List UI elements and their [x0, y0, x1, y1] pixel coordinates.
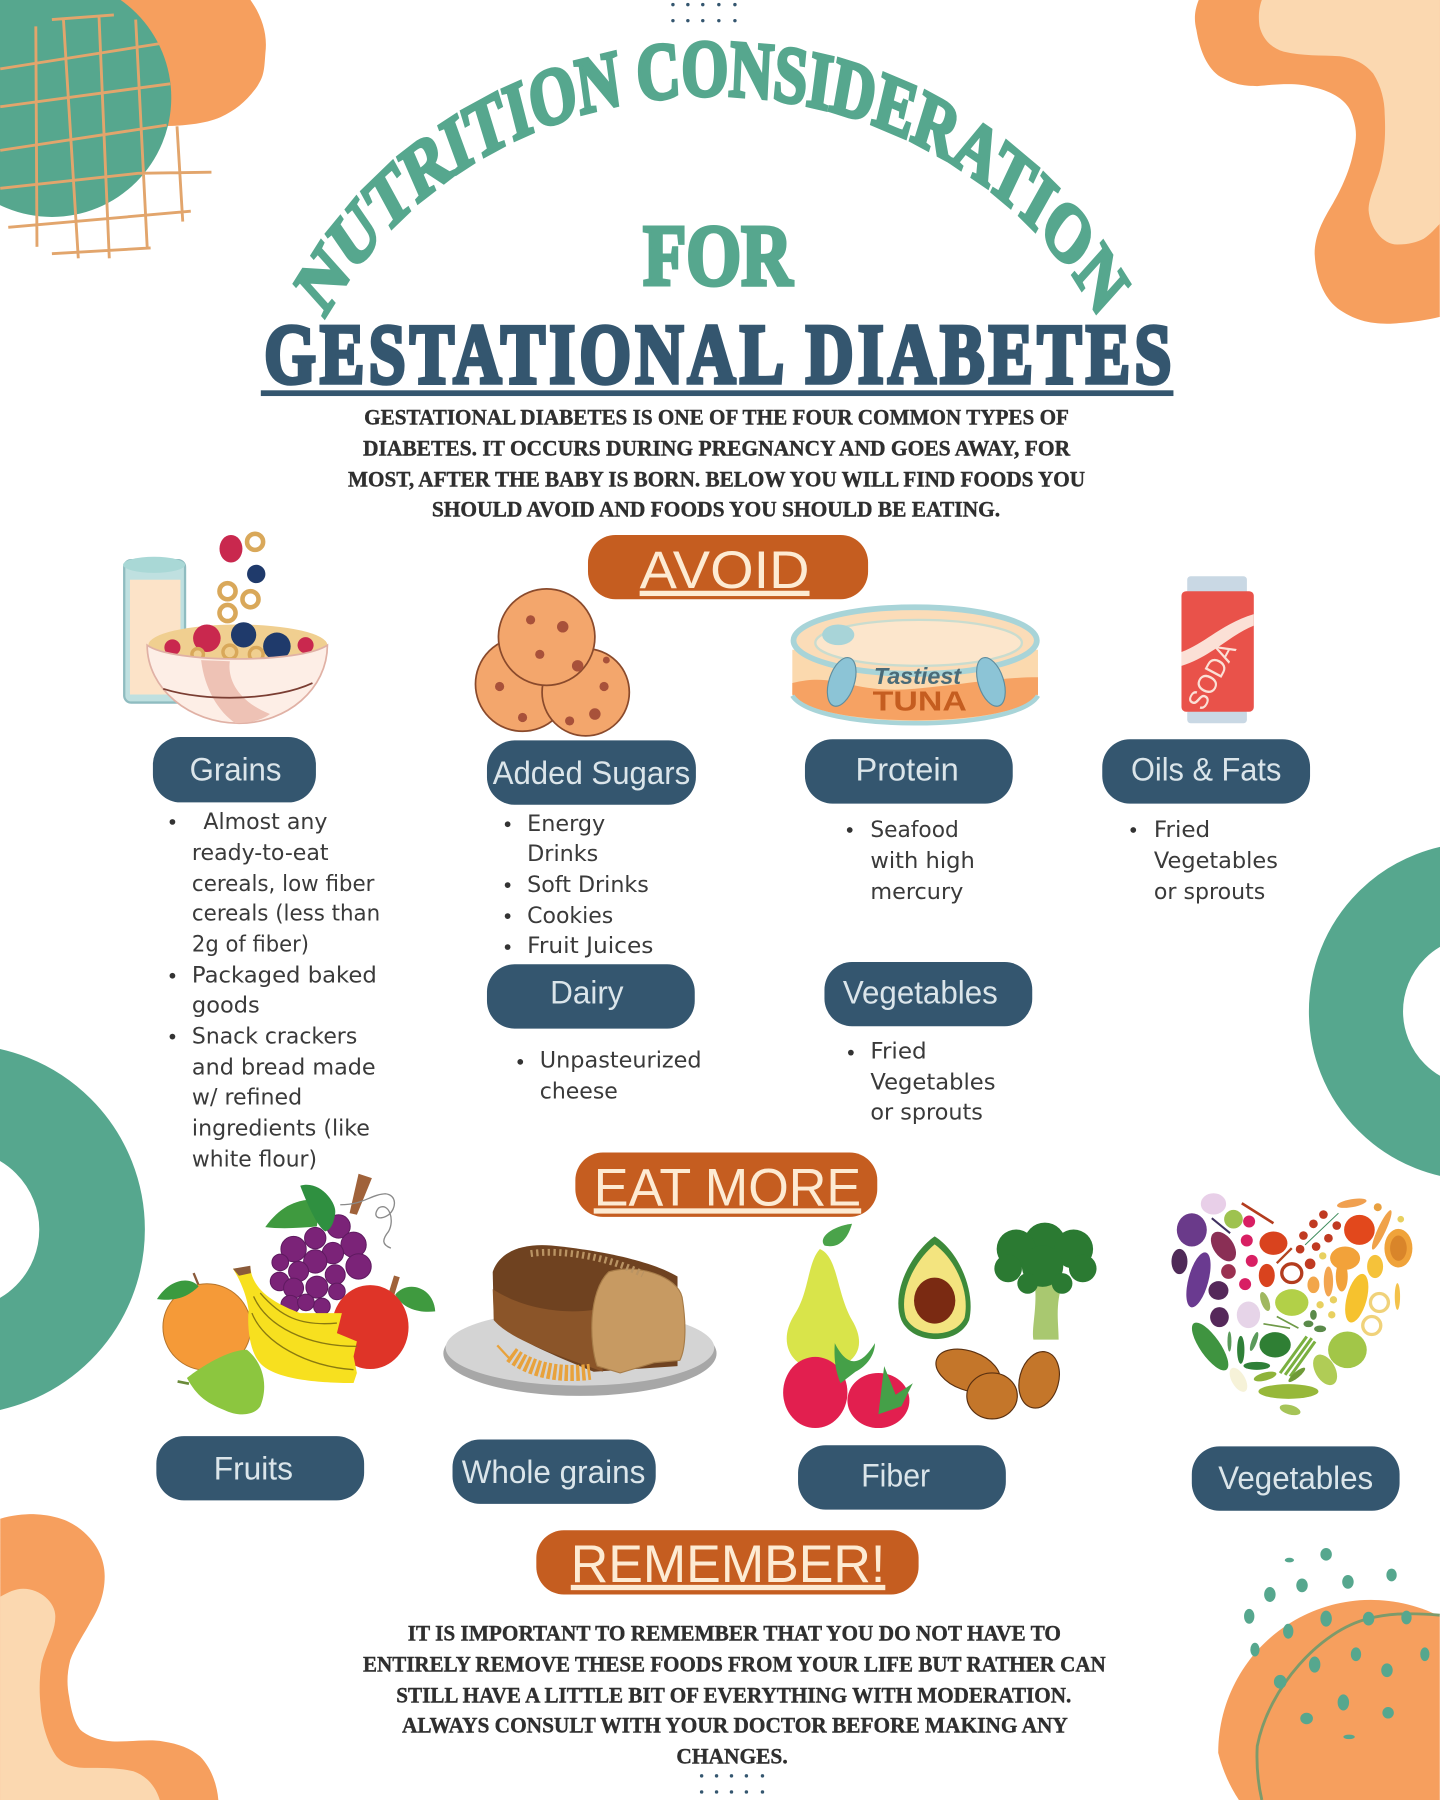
decoration: bottom dots	[700, 1774, 764, 1794]
decoration: bottom right circle with dots	[1218, 1548, 1440, 1800]
list: grains: Packaged baked	[192, 964, 377, 989]
intro paragraph: DIABETES. IT OCCURS DURING PREGNANCY AND GOES AWAY, FOR	[363, 437, 1070, 461]
icon: tuna can: TUNA	[873, 686, 967, 717]
list: protein	[847, 818, 975, 905]
decoration: left green ring	[0, 1097, 92, 1361]
pill: Protein	[805, 739, 1013, 804]
list: vegetables	[848, 1039, 996, 1125]
list: grains: goods	[192, 994, 260, 1019]
list: grains: 2g of fiber)	[192, 933, 309, 958]
closing paragraph: ALWAYS CONSULT WITH YOUR DOCTOR BEFORE MAKING ANY	[402, 1713, 1068, 1737]
list: added sugars: Drinks	[527, 842, 598, 867]
pill: Vegetables eat more: Vegetables	[1218, 1460, 1373, 1496]
pill: Vegetables eat more	[1192, 1446, 1400, 1511]
title: Gestational Diabetes: GESTATIONAL DIABETES	[264, 308, 1171, 401]
list: oils and fats	[1130, 818, 1278, 905]
closing paragraph: STILL HAVE A LITTLE BIT OF EVERYTHING WITH MODERATION.	[396, 1683, 1071, 1707]
title: FOR: FOR	[643, 207, 793, 304]
pill: Fruits: Fruits	[214, 1451, 293, 1487]
pill: Protein: Protein	[855, 752, 959, 788]
list: protein: Seafood	[870, 818, 959, 843]
pill: Added Sugars: Added Sugars	[493, 755, 690, 791]
pill: Fruits	[156, 1436, 364, 1500]
list: grains: ingredients (like	[192, 1116, 370, 1141]
pill: Grains	[153, 737, 316, 802]
list: grains: ready-to-eat	[192, 841, 329, 866]
icon: cookies	[475, 589, 629, 736]
pill: Oils & Fats	[1102, 739, 1310, 804]
heading: avoid	[588, 535, 868, 600]
list: grains: white flour)	[192, 1147, 317, 1172]
list: added sugars: Cookies	[527, 904, 613, 929]
list: protein: mercury	[870, 880, 963, 905]
pill: Vegetables avoid: Vegetables	[843, 974, 998, 1010]
closing paragraph	[363, 1621, 1106, 1768]
icon: cereal bowl and milk	[123, 534, 327, 723]
list: grains: Snack crackers	[192, 1024, 357, 1049]
decoration: bottom left blob	[0, 1514, 218, 1800]
decoration: top right blob	[1195, 0, 1440, 324]
heading: eat more: EAT MORE	[594, 1158, 861, 1217]
icon: fiber foods	[783, 1223, 1097, 1428]
pill: Grains: Grains	[190, 752, 281, 788]
list: grains: Almost any	[203, 810, 327, 835]
title: curved heading: NUTRITION CONSIDERATION	[292, 40, 1132, 320]
icon: fruits	[157, 1174, 435, 1414]
list: dairy	[517, 1049, 702, 1105]
list: added sugars: Fruit Juices	[527, 934, 653, 959]
icon: tuna can: Tastiest	[874, 663, 962, 689]
pill: Vegetables avoid	[824, 962, 1032, 1026]
list: grains	[170, 810, 380, 1172]
title underline	[261, 390, 1173, 396]
closing paragraph: ENTIRELY REMOVE THESE FOODS FROM YOUR LIFE BUT RATHER CAN	[363, 1652, 1106, 1676]
list: added sugars: Energy	[527, 812, 605, 837]
pill: Whole grains: Whole grains	[462, 1454, 645, 1490]
pill: Fiber	[798, 1445, 1006, 1510]
decoration: top left blob and grid	[0, 0, 266, 258]
intro paragraph: GESTATIONAL DIABETES IS ONE OF THE FOUR COMMON TYPES OF	[364, 406, 1069, 430]
pill: Added Sugars	[487, 740, 696, 805]
intro paragraph	[348, 406, 1085, 522]
list: grains: w/ refined	[192, 1085, 302, 1110]
pill: Dairy	[487, 964, 695, 1029]
list: added sugars: Soft Drinks	[527, 873, 649, 898]
list: oils and fats: or sprouts	[1154, 880, 1265, 905]
icon: whole grain bread	[443, 1245, 717, 1396]
intro paragraph: SHOULD AVOID AND FOODS YOU SHOULD BE EATING.	[432, 498, 1000, 522]
icon: soda can: SODA	[1181, 637, 1242, 715]
decoration: right green ring	[1356, 890, 1440, 1133]
list: vegetables: Vegetables	[870, 1070, 996, 1095]
decoration: top dots	[671, 3, 737, 22]
closing paragraph: CHANGES.	[676, 1744, 788, 1768]
list: vegetables: Fried	[870, 1039, 927, 1064]
icon: soda can	[1181, 576, 1254, 723]
list: dairy: Unpasteurized	[540, 1049, 702, 1074]
icon: vegetable heart	[1171, 1193, 1412, 1417]
intro paragraph: MOST, AFTER THE BABY IS BORN. BELOW YOU WILL FIND FOODS YOU	[348, 468, 1085, 492]
pill: Oils & Fats: Oils & Fats	[1131, 752, 1281, 788]
heading: avoid: AVOID	[640, 541, 810, 600]
pill: Fiber: Fiber	[861, 1458, 930, 1494]
list: vegetables: or sprouts	[870, 1100, 983, 1125]
icon: tuna can	[792, 607, 1038, 725]
list: oils and fats: Fried	[1154, 818, 1210, 843]
list: oils and fats: Vegetables	[1154, 849, 1278, 874]
closing paragraph: IT IS IMPORTANT TO REMEMBER THAT YOU DO NOT HAVE TO	[408, 1621, 1061, 1645]
heading: remember: REMEMBER!	[571, 1535, 885, 1594]
list: dairy: cheese	[540, 1080, 618, 1105]
list: grains: cereals, low fiber	[192, 872, 374, 897]
list: protein: with high	[870, 849, 975, 874]
list: added sugars	[505, 812, 653, 959]
list: grains: cereals (less than	[192, 902, 380, 927]
pill: Whole grains	[453, 1440, 656, 1504]
list: grains: and bread made	[192, 1055, 376, 1080]
pill: Dairy: Dairy	[550, 974, 624, 1010]
